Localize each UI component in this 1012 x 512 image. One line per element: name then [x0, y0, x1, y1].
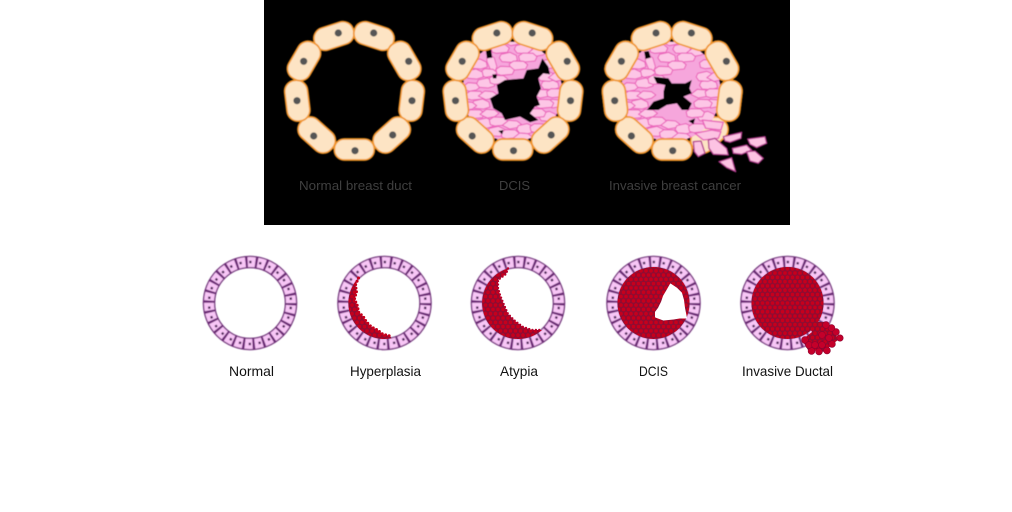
label: Normal: Normal	[229, 363, 274, 379]
stage: DCIS	[607, 256, 700, 379]
diagram: invasive breast cancer duct	[601, 19, 767, 172]
stage: Invasive Ductal	[741, 256, 843, 379]
stage: Normal	[203, 256, 297, 379]
red cell crescent, hyperplasia	[348, 278, 392, 339]
label: Atypia: Atypia	[500, 363, 538, 379]
black panel background	[264, 0, 790, 225]
top panel: breast duct progression on black	[264, 0, 790, 225]
pale duct cell overrun by tumour	[686, 112, 733, 158]
bottom row: five stage progression	[203, 256, 843, 379]
label: Invasive Ductal: Invasive Ductal	[742, 363, 833, 379]
diagram: normal breast duct	[283, 19, 426, 160]
label: Normal breast duct: Normal breast duct	[299, 179, 413, 193]
label: Hyperplasia: Hyperplasia	[350, 363, 421, 379]
diagram: DCIS duct filled with pink cells	[442, 19, 584, 160]
red cell mass breaking through duct	[752, 267, 843, 355]
invading pink cells	[693, 120, 767, 172]
red cell mass, atypia	[482, 268, 542, 339]
label: Invasive breast cancer: Invasive breast cancer	[609, 179, 741, 193]
stage: Atypia	[471, 256, 565, 379]
label: DCIS (top): DCIS	[499, 179, 530, 193]
stage: Hyperplasia	[338, 256, 431, 379]
label: DCIS: DCIS	[639, 363, 668, 379]
red cell mass with white lumen	[618, 267, 690, 339]
